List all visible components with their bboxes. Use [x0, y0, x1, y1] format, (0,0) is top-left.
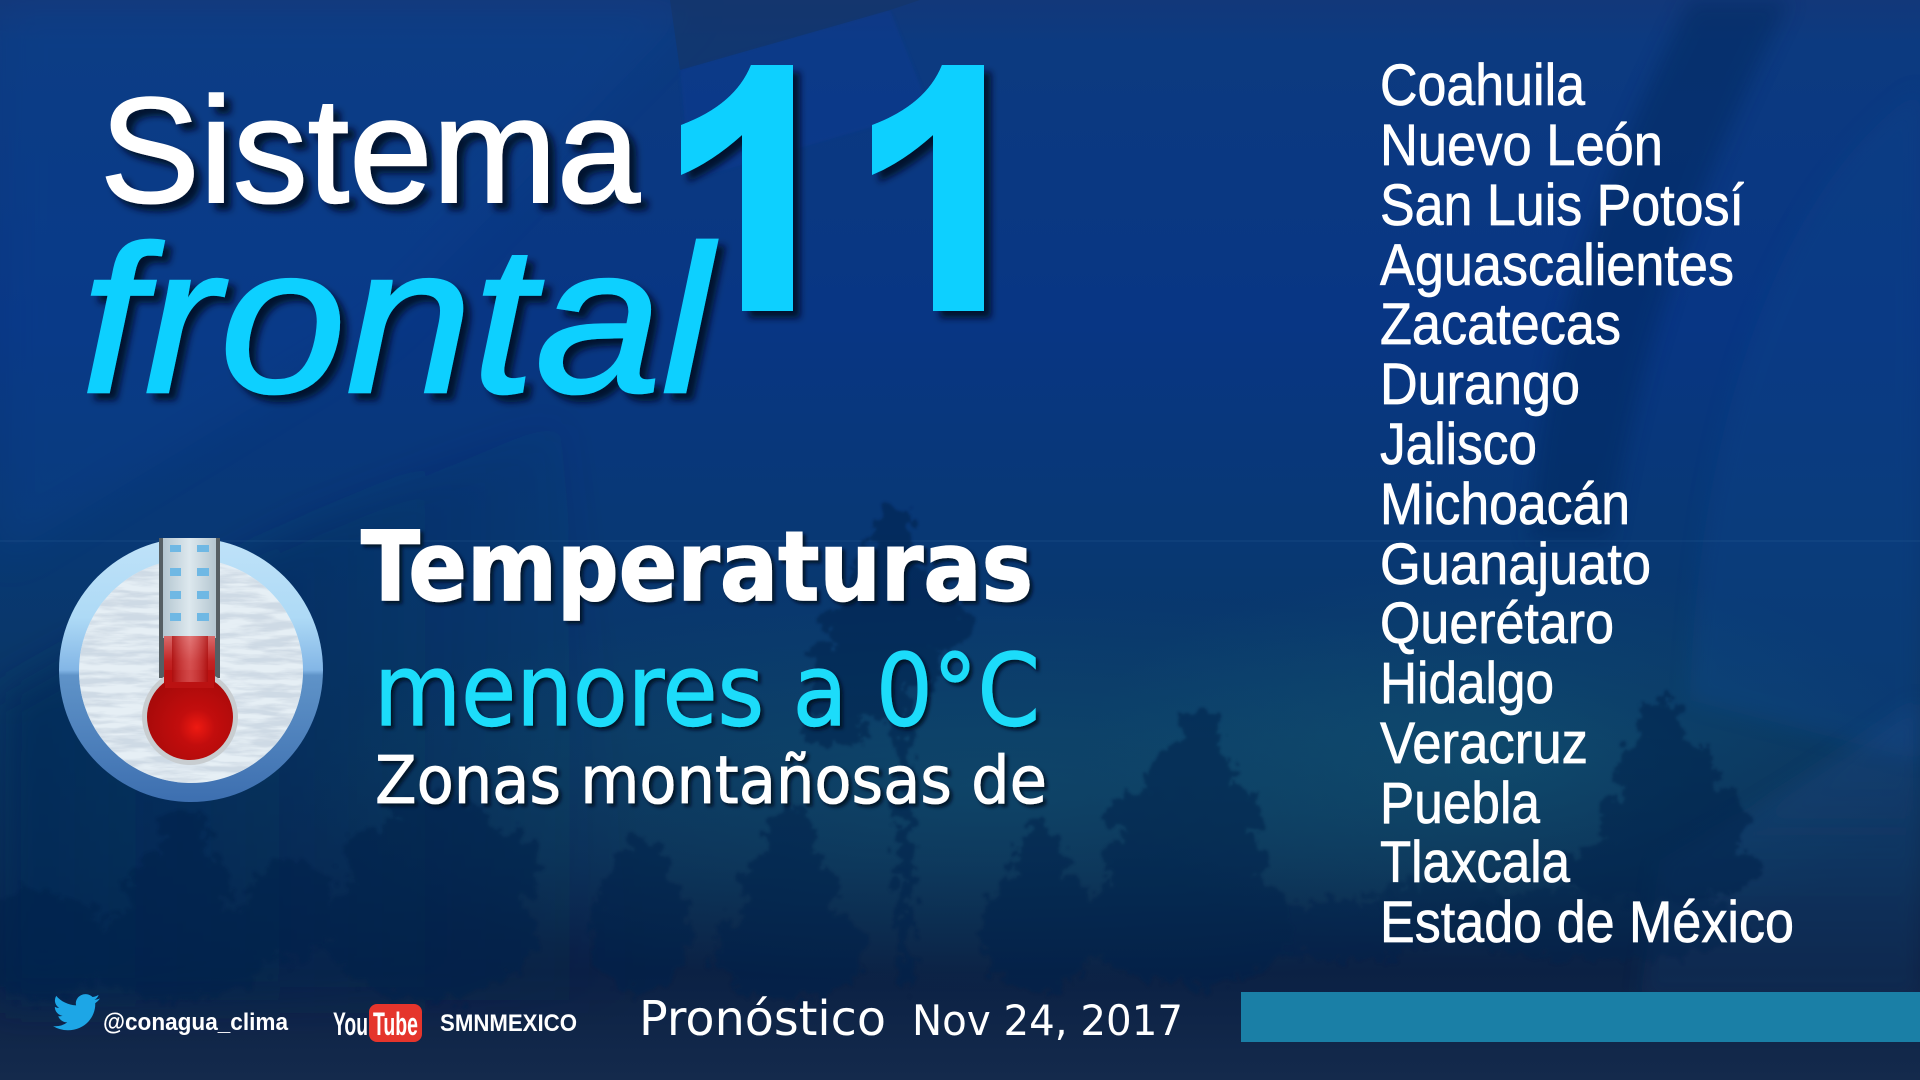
list of states: San Luis Potosí [1380, 173, 1744, 238]
list of states: Hidalgo [1380, 651, 1554, 716]
list of states: Estado de México [1380, 890, 1794, 955]
title: frontal: frontal [81, 202, 718, 437]
icon: youtube logo: You [333, 1006, 368, 1042]
text: Zonas montañosas de: Zonas montañosas de [375, 742, 1047, 819]
list of states: Jalisco [1380, 412, 1537, 477]
title: Sistema: Sistema [100, 66, 641, 234]
list of states: Zacatecas [1380, 292, 1621, 357]
text: youtube channel: SMNMEXICO [440, 1010, 577, 1037]
list of states: Nuevo León [1380, 113, 1663, 178]
title: number 11 [681, 65, 996, 323]
tree silhouettes [0, 502, 1760, 1000]
icon: twitter bird [53, 994, 100, 1030]
text: menores a 0°C: menores a 0°C [374, 632, 1040, 749]
list of states: Coahuila [1380, 53, 1586, 118]
list of states: Querétaro [1380, 591, 1614, 656]
list of states: Michoacán [1380, 472, 1630, 537]
list of states: Guanajuato [1380, 532, 1651, 597]
heading: Temperaturas: Temperaturas [361, 511, 1033, 623]
icon: thermometer [59, 538, 323, 802]
icon: youtube logo [333, 1004, 422, 1042]
text: Pronóstico: Pronóstico [639, 991, 886, 1047]
text: twitter handle: @conagua_clima [103, 1009, 289, 1036]
list of states: Veracruz [1380, 711, 1588, 776]
footer bar [1241, 992, 1920, 1042]
list of states [1380, 53, 1794, 955]
list of states: Tlaxcala [1380, 830, 1571, 895]
text: date: Nov 24, 2017 [912, 996, 1183, 1045]
list of states: Durango [1380, 352, 1580, 417]
icon: youtube logo: Tube [373, 1006, 418, 1042]
list of states: Aguascalientes [1380, 233, 1734, 298]
list of states: Puebla [1380, 771, 1541, 836]
